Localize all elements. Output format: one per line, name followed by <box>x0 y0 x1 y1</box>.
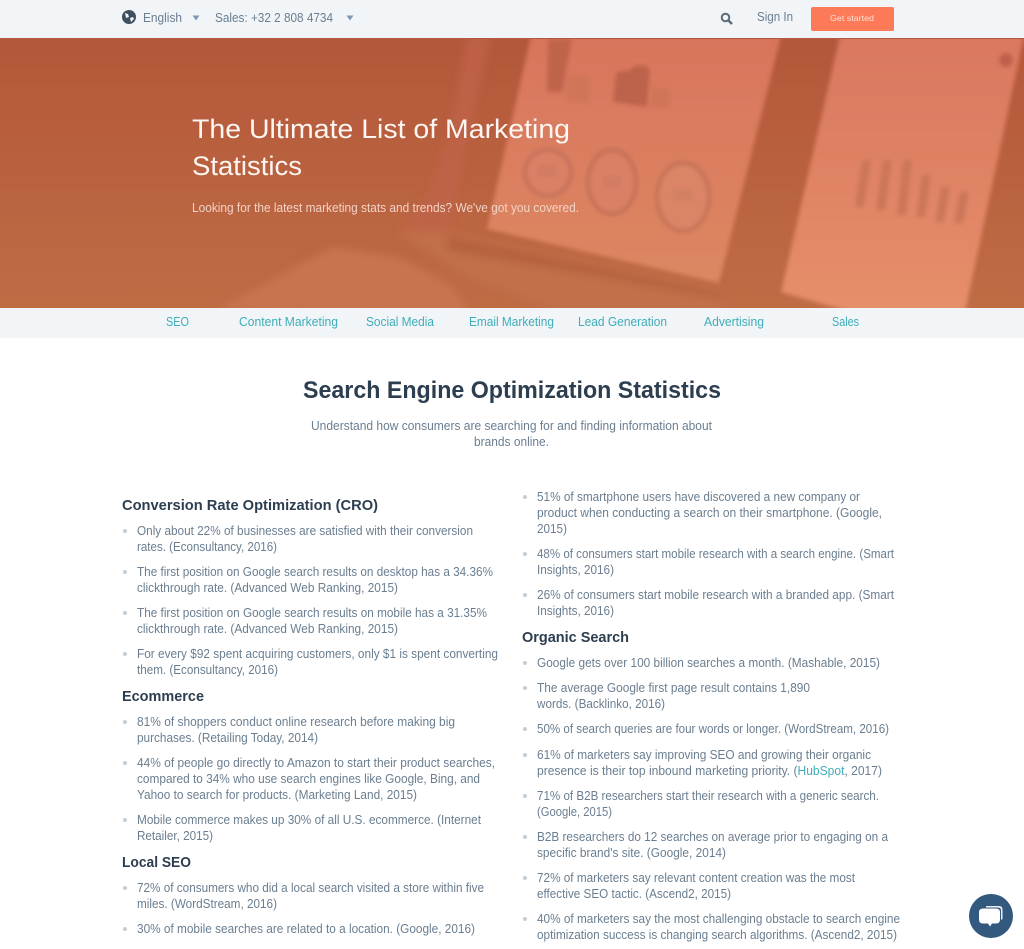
list: ecommerce: purchases. (Retailing Today, 2014) <box>137 731 318 745</box>
list: ecommerce: Yahoo to search for products. (Marketing Land, 2015) <box>137 788 417 802</box>
hero title <box>192 114 570 181</box>
hero subtitle: Looking for the latest marketing stats and trends? We've got you covered. <box>192 201 579 215</box>
list: organic search: 72% of marketers say relevant content creation was the most <box>537 871 855 885</box>
sales phone number: Sales: +32 2 808 4734 <box>215 11 333 25</box>
list: conversion rate optimization: Only about 22% of businesses are satisfied with their conversion <box>137 524 473 538</box>
section tab bar: Advertising <box>704 315 764 329</box>
list: organic search: Google gets over 100 billion searches a month. (Mashable, 2015) <box>537 656 880 670</box>
section tab bar: Social Media <box>366 315 434 329</box>
list: mobile search continued: 2015) <box>537 522 567 536</box>
list: organic search: optimization success is changing search algorithms. (Ascend2, 2015) <box>537 928 897 942</box>
list: mobile search continued: 48% of consumers start mobile research with a search engine. (Smart <box>537 547 894 561</box>
language selector: English <box>143 11 182 25</box>
list: organic search: 61% of marketers say improving SEO and growing their organic <box>537 748 871 762</box>
section tab bar: Sales <box>832 315 859 329</box>
list: ecommerce: compared to 34% who use search engines like Google, Bing, and <box>137 772 480 786</box>
right column: statistics <box>522 490 900 942</box>
heading: local seo: Local SEO <box>122 854 191 871</box>
section tab bar: Email Marketing <box>469 315 554 329</box>
list: organic search: effective SEO tactic. (Ascend2, 2015) <box>537 887 731 901</box>
list: mobile search continued <box>523 490 894 618</box>
list: mobile search continued: Insights, 2016) <box>537 604 614 618</box>
list: conversion rate optimization: The first position on Google search results on mobile has a 31.35% <box>137 606 487 620</box>
section intro text <box>311 419 712 449</box>
list: conversion rate optimization: rates. (Econsultancy, 2016) <box>137 540 277 554</box>
list: conversion rate optimization: them. (Econsultancy, 2016) <box>137 663 278 677</box>
list: local seo: 30% of mobile searches are related to a location. (Google, 2016) <box>137 922 475 936</box>
list: organic search: 50% of search queries are four words or longer. (WordStream, 2016) <box>537 722 889 736</box>
list: organic search <box>523 656 900 942</box>
list: conversion rate optimization: clickthrough rate. (Advanced Web Ranking, 2015) <box>137 622 398 636</box>
list: mobile search continued: 51% of smartphone users have discovered a new company or <box>537 490 860 504</box>
list: organic search: The average Google first page result contains 1,890 <box>537 681 810 695</box>
list: ecommerce: Retailer, 2015) <box>137 829 213 843</box>
section intro text: Understand how consumers are searching for and finding information about <box>311 419 712 433</box>
list: local seo: 72% of consumers who did a local search visited a store within five <box>137 881 484 895</box>
icon: globe <box>122 10 136 24</box>
list: organic search: 40% of marketers say the most challenging obstacle to search engine <box>537 912 900 926</box>
left column: statistics <box>122 497 498 936</box>
list: organic search: B2B researchers do 12 searches on average prior to engaging on a <box>537 830 888 844</box>
sign in link: Sign In <box>757 10 793 24</box>
section intro text: brands online. <box>474 435 549 449</box>
list: conversion rate optimization: For every $92 spent acquiring customers, only $1 is spent converting <box>137 647 498 661</box>
list: conversion rate optimization <box>123 524 498 677</box>
list: ecommerce <box>123 715 495 843</box>
list: conversion rate optimization: The first position on Google search results on desktop has a 34.36% <box>137 565 493 579</box>
get started button <box>811 7 894 31</box>
list: ecommerce: 81% of shoppers conduct online research before making big <box>137 715 455 729</box>
section tab bar <box>0 308 1024 338</box>
section tab bar: Lead Generation <box>578 315 667 329</box>
heading: ecommerce: Ecommerce <box>122 688 204 705</box>
list: local seo: miles. (WordStream, 2016) <box>137 897 277 911</box>
hero banner <box>0 36 1024 312</box>
heading: organic search: Organic Search <box>522 629 629 646</box>
heading: conversion rate optimization: Conversion Rate Optimization (CRO) <box>122 497 378 514</box>
list: ecommerce: Mobile commerce makes up 30% of all U.S. ecommerce. (Internet <box>137 813 481 827</box>
list: conversion rate optimization: clickthrough rate. (Advanced Web Ranking, 2015) <box>137 581 398 595</box>
list: mobile search continued: 26% of consumers start mobile research with a branded app. (Smart <box>537 588 894 602</box>
icon: phone dropdown arrow <box>346 16 354 20</box>
get started button: Get started <box>830 13 874 23</box>
list: organic search: words. (Backlinko, 2016) <box>536 697 665 711</box>
list: ecommerce: 44% of people go directly to Amazon to start their product searches, <box>137 756 495 770</box>
list: organic search: presence is their top inbound marketing priority. (HubSpot, 2017) <box>537 764 882 778</box>
section tab bar: SEO <box>166 315 189 329</box>
list: mobile search continued: product when conducting a search on their smartphone. (Google, <box>537 506 882 520</box>
list: local seo <box>123 881 484 936</box>
icon: chat button <box>969 894 1013 938</box>
section tab bar: Content Marketing <box>239 315 338 329</box>
icon: search <box>722 14 732 24</box>
top navigation bar <box>0 0 1024 39</box>
list: organic search: (Google, 2015) <box>537 805 612 819</box>
hero title: Statistics <box>192 151 302 181</box>
hero background photo: blurred dashboards <box>217 36 1024 312</box>
hero title: The Ultimate List of Marketing <box>192 114 570 144</box>
section heading: Search Engine Optimization Statistics <box>303 377 721 404</box>
list: organic search: specific brand's site. (Google, 2014) <box>537 846 726 860</box>
list: organic search: 71% of B2B researchers start their research with a generic search. <box>537 789 879 803</box>
list: mobile search continued: Insights, 2016) <box>537 563 614 577</box>
icon: language dropdown arrow <box>192 16 200 20</box>
